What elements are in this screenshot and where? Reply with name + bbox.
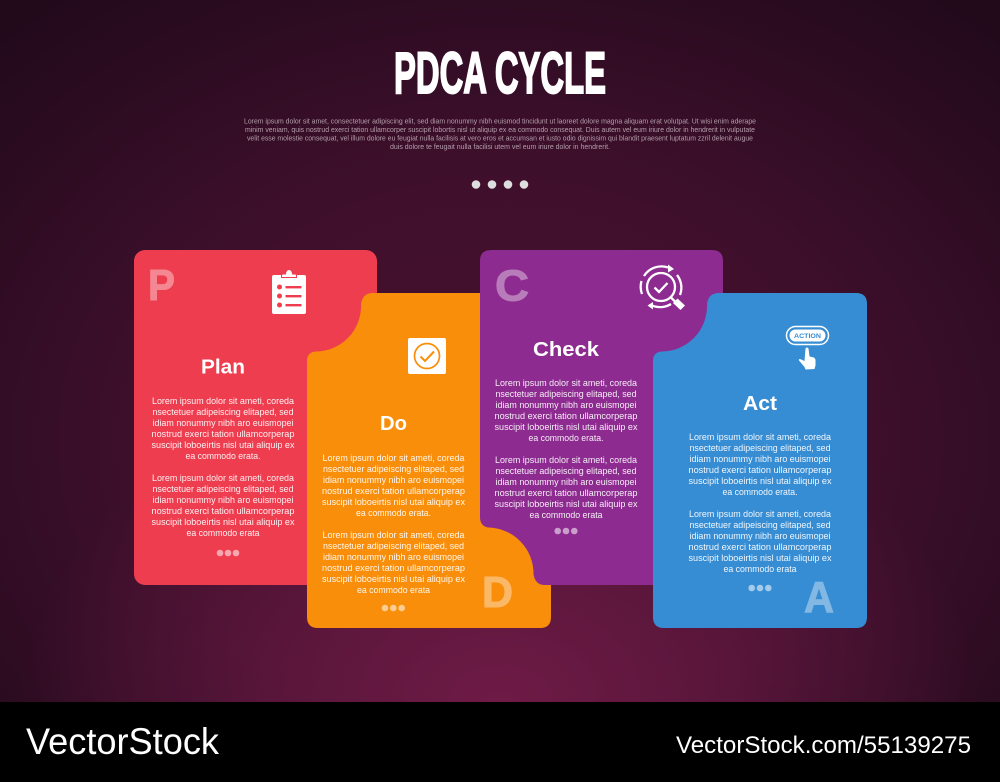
- body text: act: [688, 431, 832, 574]
- body text: plan: Lorem ipsum dolor sit ameti, coreda: [152, 472, 295, 483]
- body text: act: suscipit loboeirtis nisl utai aliquip ex: [688, 552, 832, 563]
- body text: act: ea commodo erata: [724, 563, 797, 574]
- footer bar: [0, 702, 1000, 782]
- body text: act: Lorem ipsum dolor sit ameti, coreda: [689, 508, 832, 519]
- body text: act: ea commodo erata.: [722, 486, 798, 497]
- body text: plan: nsectetuer adipeiscing elitaped, sed: [152, 483, 294, 494]
- body text: plan: ea commodo erata.: [186, 450, 260, 461]
- body text: check: nostrud exerci tation ullamcorperap: [494, 487, 638, 498]
- icon: clipboard: [272, 270, 306, 314]
- icon: magnifier with cycle: [641, 264, 685, 310]
- body text: plan: nsectetuer adipeiscing elitaped, sed: [152, 406, 294, 417]
- body text: act: nostrud exerci tation ullamcorperap: [688, 464, 832, 475]
- body text: do: suscipit loboeirtis nisl utai aliquip ex: [322, 496, 465, 507]
- body text: do: suscipit loboeirtis nisl utai aliquip ex: [322, 573, 465, 584]
- heading: plan: Plan: [201, 356, 245, 378]
- body text: check: Lorem ipsum dolor sit ameti, coreda: [495, 377, 638, 388]
- intro text block: Lorem ipsum dolor sit amet, consectetuer adipiscing elit, sed diam nonummy nibh euismod tincidunt ut laoreet dolore magna aliquam erat volutpat. Ut wisi enim aderape: [244, 116, 756, 126]
- body text: act: idiam nonummy nibh aro euismopei: [690, 453, 830, 464]
- body text: act: idiam nonummy nibh aro euismopei: [690, 530, 830, 541]
- body text: check: Lorem ipsum dolor sit ameti, coreda: [495, 454, 638, 465]
- body text: plan: nostrud exerci tation ullamcorperap: [152, 428, 294, 439]
- body text: plan: idiam nonummy nibh aro euismopei: [152, 494, 294, 505]
- dots: plan: [217, 550, 239, 556]
- intro text block: [244, 116, 756, 151]
- intro text block: duis dolore te feugait nulla facilisi utem vel eum iriure dolor in hendrerit.: [390, 142, 610, 151]
- letter D: D: [482, 568, 513, 617]
- panel: do: [307, 293, 551, 628]
- body text: do: Lorem ipsum dolor sit ameti, coreda: [322, 529, 465, 540]
- header pagination dots: [472, 180, 528, 189]
- panel: check: [480, 250, 723, 585]
- dots: check: [554, 528, 578, 534]
- footer url: VectorStock.com/55139275: [676, 732, 971, 759]
- body text: check: [494, 377, 638, 520]
- body text: do: idiam nonummy nibh aro euismopei: [323, 551, 464, 562]
- icon: action button with hand: ACTION: [794, 333, 821, 340]
- icon: action button with hand: [786, 326, 828, 370]
- heading: do: Do: [380, 413, 407, 435]
- body text: plan: suscipit loboeirtis nisl utai aliquip ex: [152, 516, 295, 527]
- body text: act: nsectetuer adipeiscing elitaped, sed: [690, 519, 830, 530]
- body text: do: ea commodo erata: [357, 584, 431, 595]
- letter C: C: [495, 262, 529, 310]
- body text: do: Lorem ipsum dolor sit ameti, coreda: [322, 452, 465, 463]
- body text: act: nsectetuer adipeiscing elitaped, sed: [690, 442, 830, 453]
- panel: act: [653, 293, 867, 628]
- letter P: P: [148, 261, 175, 310]
- body text: check: ea commodo erata: [530, 509, 603, 520]
- body text: act: suscipit loboeirtis nisl utai aliquip ex: [688, 475, 832, 486]
- body text: do: nostrud exerci tation ullamcorperap: [322, 485, 465, 496]
- body text: plan: Lorem ipsum dolor sit ameti, coreda: [152, 395, 295, 406]
- body text: do: nsectetuer adipeiscing elitaped, sed: [323, 540, 464, 551]
- footer logo: VectorStock: [26, 721, 219, 762]
- heading: act: Act: [743, 393, 777, 415]
- intro text block: minim veniam, quis nostrud exerci tation ullamcorper suscipit lobortis nisl ut aliquip ex ea commodo consequat. Duis autem vel eum iriure dolor in hendrerit in vulputate: [245, 125, 755, 134]
- title: PDCA CYCLE: [394, 41, 606, 106]
- body text: do: nsectetuer adipeiscing elitaped, sed: [323, 463, 464, 474]
- body text: plan: ea commodo erata: [186, 527, 260, 538]
- body text: plan: suscipit loboeirtis nisl utai aliquip ex: [152, 439, 295, 450]
- body text: plan: nostrud exerci tation ullamcorperap: [152, 505, 294, 516]
- body text: check: nsectetuer adipeiscing elitaped, sed: [496, 388, 636, 399]
- body text: check: suscipit loboeirtis nisl utai aliquip ex: [494, 421, 638, 432]
- body text: check: suscipit loboeirtis nisl utai aliquip ex: [494, 498, 638, 509]
- body text: plan: idiam nonummy nibh aro euismopei: [152, 417, 294, 428]
- body text: act: Lorem ipsum dolor sit ameti, coreda: [689, 431, 832, 442]
- letter A: A: [804, 573, 834, 622]
- dots: act: [748, 585, 772, 591]
- body text: check: idiam nonummy nibh aro euismopei: [496, 476, 636, 487]
- dots: do: [382, 605, 405, 611]
- body text: act: nostrud exerci tation ullamcorperap: [688, 541, 832, 552]
- body text: check: nsectetuer adipeiscing elitaped, sed: [496, 465, 636, 476]
- intro text block: velit esse molestie consequat, vel illum dolore eu feugiat nulla facilisis at vero eros et accumsan et iusto odio dignissim qui blandit praesent luptatum zzril delenit augue: [247, 134, 753, 142]
- body text: check: ea commodo erata.: [528, 432, 604, 443]
- body text: do: idiam nonummy nibh aro euismopei: [323, 474, 464, 485]
- body text: do: ea commodo erata.: [356, 507, 431, 518]
- heading: check: Check: [533, 339, 600, 361]
- body text: check: nostrud exerci tation ullamcorperap: [494, 410, 638, 421]
- icon: check box: [408, 338, 446, 374]
- body text: do: [322, 452, 465, 595]
- body text: do: nostrud exerci tation ullamcorperap: [322, 562, 465, 573]
- panel: plan: [134, 250, 377, 585]
- body text: check: idiam nonummy nibh aro euismopei: [496, 399, 636, 410]
- body text: plan: [152, 395, 295, 538]
